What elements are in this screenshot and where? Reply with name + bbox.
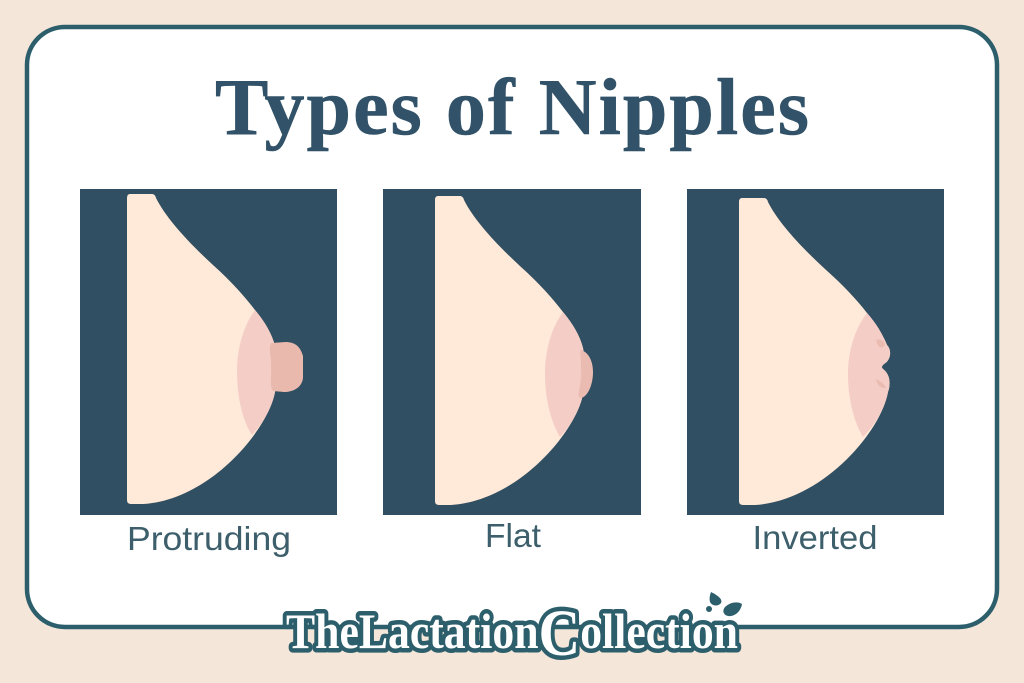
areola	[848, 313, 890, 437]
panel: protruding	[80, 189, 337, 515]
logo wordmark: TheLactation	[286, 603, 575, 659]
label: inverted: Inverted	[752, 519, 878, 556]
areola	[237, 310, 277, 435]
panel: flat	[383, 189, 641, 515]
nipple	[270, 342, 303, 392]
breast shape	[127, 194, 277, 504]
label: protruding: Protruding	[127, 520, 291, 557]
title: Types of Nipples	[215, 64, 809, 152]
label: flat: Flat	[485, 517, 541, 554]
panel: inverted	[687, 189, 944, 515]
nipple	[579, 350, 593, 398]
icon: milk splash	[706, 592, 742, 616]
areola	[545, 312, 585, 437]
logo wordmark: ollection	[580, 603, 738, 659]
logo wordmark: C	[539, 597, 580, 670]
breast shape	[739, 198, 890, 505]
nipple folds	[876, 339, 886, 388]
breast shape	[435, 196, 585, 505]
